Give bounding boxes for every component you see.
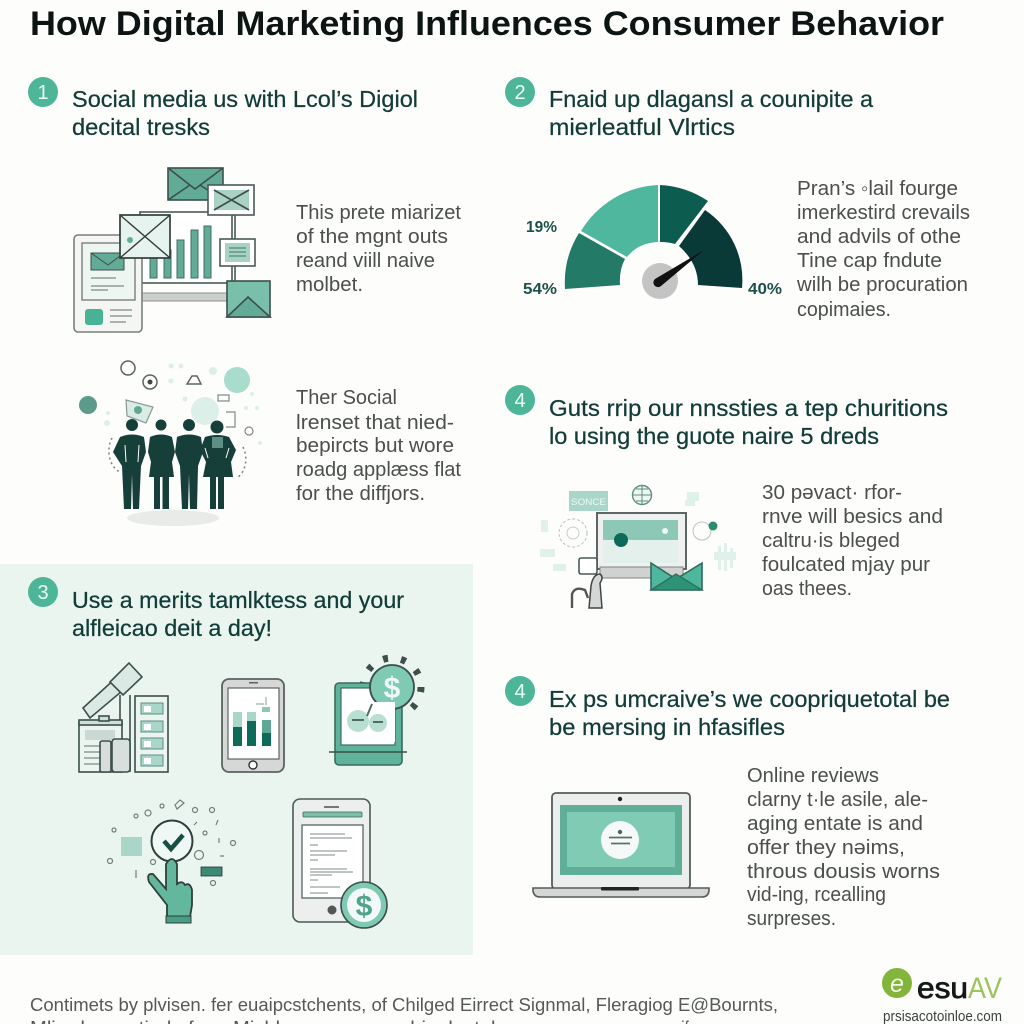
badge 4 [505,385,535,415]
text block 5: clarny t·le asile, ale- [747,789,928,811]
icon: hand pressing check mark [108,800,236,923]
text block 5 [747,765,940,930]
logo [882,968,1002,1024]
text block 1b: for the diffjors. [296,483,425,505]
text block 1: This prete miarizet [296,202,461,224]
text block 2: wilh be procuration [796,274,968,296]
panel: section 4 upper [505,385,948,608]
badge 2 [505,77,535,107]
text block 1b: roadg applæss flat [296,459,461,481]
icon: phone with document and dollar coin [293,799,387,928]
badge 3 [28,577,58,607]
heading 3: Use a merits tamlktess and your [72,587,404,613]
panel: section 3 [0,564,473,955]
heading 1: Social media us with Lcol’s Digiol [72,86,418,112]
text block 5: aging entate is and [747,813,923,835]
badge 4: 4 [514,390,526,412]
footer text: Contimets by plvisen. fer euaipcstchents, of Chilged Eirrect Signmal, Fleragiog E@Bournts, [30,995,778,1015]
icon: tablet with bar chart [222,679,284,772]
text block 2: imerkestird crevails [797,202,970,224]
text block 5: offer they nəims, [747,837,905,859]
heading 2: Fnaid up dlagansl a counipite a [549,86,873,112]
heading 1: decital tresks [72,114,210,140]
icon: laptop with envelope and hand [540,486,736,608]
text block 4: oas thees. [762,578,852,600]
text block 1: of the mgnt outs [296,226,448,248]
logo: esu [917,972,968,1005]
heading 3: alfleicao deit a day! [72,615,272,641]
text block 2 [796,178,970,321]
badge 2: 2 [514,82,526,104]
text block 5: surpreses. [747,908,836,930]
logo: e [890,970,904,998]
heading 4: Guts rrip our nnssties a tep churitions [549,395,948,421]
text block 2: Pran’s ◦lail fourge [797,178,958,200]
text block 1b [296,387,461,505]
text block 5: Online reviews [747,765,879,787]
text block 4: foulcated mjay pur [762,554,930,576]
title: How Digital Marketing Influences Consumer Behavior [30,5,944,43]
badge 5 [505,676,535,706]
text block 4: 30 pəvact· rfor- [762,482,902,504]
badge 5: 4 [514,681,526,703]
text block 1b: lrenset that nied- [296,412,454,434]
heading 5: Ex ps umcraive’s we coopriquetotal be [549,686,950,712]
gauge chart: 19% [526,219,557,236]
text block 2: copimaies. [797,299,891,321]
text block 4: rnve will besics and [762,506,943,528]
icon: screen with coin and gear [329,658,421,765]
heading 4 [549,395,948,449]
badge 3: 3 [37,582,49,604]
icon: screen with coin and gear: $ [384,672,401,705]
badge 1 [28,77,58,107]
logo: AV [968,972,1002,1005]
icon: group of people with floating icons [79,361,262,526]
text block 4: caltru·is bleged [762,530,900,552]
icon: laptop [533,793,709,897]
text block 1b: Ther Social [296,387,397,409]
icon: phone with document and dollar coin: $ [356,890,373,923]
icon: buildings [79,663,168,772]
text block 1: molbet. [296,274,363,296]
text block 4 [762,482,943,600]
panel: section 2 [505,77,970,321]
panel: section 1 [28,77,461,526]
heading 5: be mersing in hfasifles [549,714,785,740]
heading 3 [72,587,404,641]
footer text [30,995,778,1024]
heading 2: mierleatful Vlrtics [549,114,735,140]
text block 1b: bepircts but wore [296,435,454,457]
text block 1: reand viill naive [296,250,435,272]
text block 2: Tine cap fndute [797,250,942,272]
heading 4: lo using the guote naire 5 dreds [549,423,879,449]
gauge chart: 40% [748,281,782,298]
gauge chart [523,185,782,299]
panel: section 5 [505,676,950,930]
heading 5 [549,686,950,740]
gauge chart: 54% [523,281,557,298]
text block 5: throus dousis worns [747,861,940,883]
heading 2 [549,86,873,140]
text block 2: and advils of othe [797,226,961,248]
icon: laptop with envelope and hand: SONCE [571,497,606,507]
badge 1: 1 [37,82,49,104]
text block 5: vid-ing, rcealling [747,884,886,906]
icon: devices and envelopes [74,168,270,332]
text block 1 [296,202,461,296]
heading 1 [72,86,418,140]
